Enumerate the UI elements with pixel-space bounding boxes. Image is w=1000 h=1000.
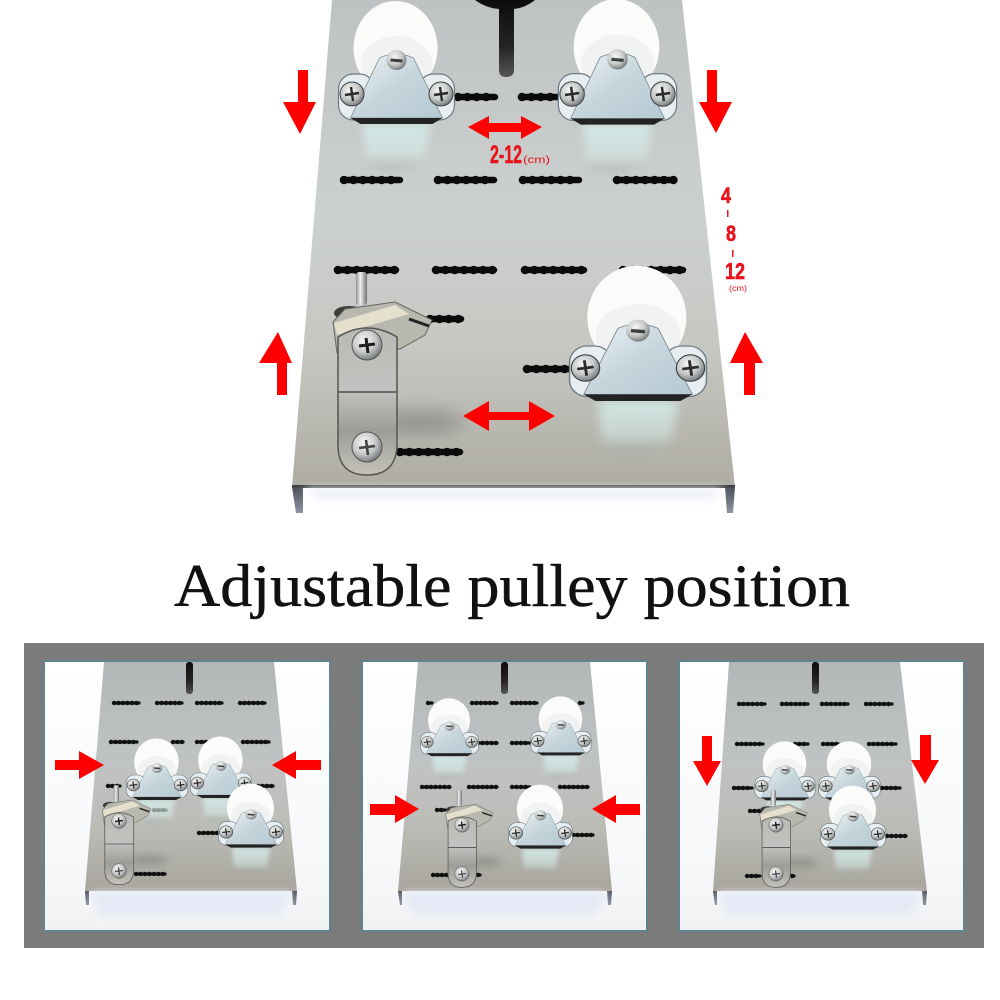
caster: top left [338,1,454,170]
casters [755,741,885,874]
label: 4-8-12 cm: 12 [725,258,745,284]
label: 4-8-12 cm: 8 [726,221,736,246]
steel plate [292,0,735,513]
caster: top right [558,0,677,172]
slots [734,704,906,876]
central guide slot [475,0,535,77]
product photo: adjustable base plate [259,0,763,513]
arrow: right down [911,735,939,784]
bracket [102,785,151,885]
double arrow: lower [463,401,555,431]
label: 2-12 cm: (cm) [523,155,550,166]
arrow: right [55,751,104,779]
panel: top row moved down [679,661,964,931]
arrow: right [370,795,419,823]
arrow: top right down [699,70,732,133]
caster: lower right [570,266,706,452]
label: 2-12 cm: 2-12 [490,141,522,169]
panel: inward to center [44,661,330,931]
label: 4-8-12 cm: (cm) [729,284,747,293]
arrow: left [592,795,640,823]
arrow: lower right up [730,332,763,395]
casters [126,736,283,872]
arrow: left down [693,736,721,786]
arrow: left [272,751,321,779]
adjustment slots [338,97,683,452]
hinge bracket [333,272,432,475]
plate [713,662,927,915]
gray band with three examples [24,643,984,948]
title: Adjustable pulley position [174,553,850,619]
label: 4-8-12 cm [721,183,747,293]
panel: bottom row inward [362,661,647,931]
plate [85,662,297,915]
bracket [760,790,807,887]
label: 4-8-12 cm: 4 [721,183,732,208]
arrow: lower left up [259,332,292,395]
double arrow: wheel spacing [468,116,542,139]
casters [420,696,591,873]
slots [422,703,593,875]
arrow: top left down [283,70,316,134]
bracket [446,790,493,887]
plate [398,662,612,915]
slots [108,703,273,874]
